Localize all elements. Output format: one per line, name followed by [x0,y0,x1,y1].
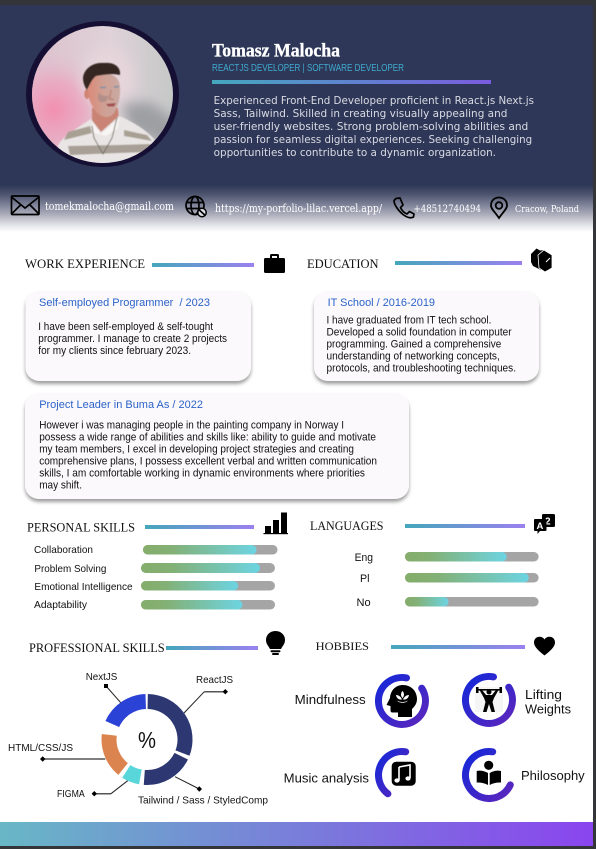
location: Cracow, Poland [515,205,579,215]
profile summary: user-friendly websites. Strong problem-solving abilities and [214,120,528,133]
icon: bar chart [264,512,288,534]
chart: personal skills bars [34,545,278,611]
card body: Developed a solid foundation in computer [326,326,512,338]
icon: location pin [491,198,507,218]
icon: reader with book [477,761,501,785]
label: Tailwind / Sass / StyledComp: Tailwind / Sass / StyledComp [138,796,268,807]
label: HTML/CSS/JS: HTML/CSS/JS [8,743,73,754]
icon: weightlifter [475,687,503,712]
card body: programming. Gained a comprehensive [326,338,501,350]
label: FIGMA: FIGMA [57,789,85,800]
segment: Tailwind / Sass / StyledComp [144,756,181,778]
skill: problem solving [34,563,275,575]
chart: professional skills donut [8,672,268,807]
label: NextJS: NextJS [86,672,117,683]
profile summary: Experienced Front-End Developer proficient in React.js Next.js [214,94,534,107]
profile summary: passion for seamless digital experiences. Seeking challenging [214,133,532,146]
heading: languages [310,519,525,533]
card title: Self-employed Programmer / 2023 [39,297,210,309]
icon: books [531,248,552,272]
heading: work experience: WORK EXPERIENCE [25,257,145,271]
segment: HTML/CSS/JS [109,735,123,769]
name and role [212,40,404,74]
label: Tailwind / Sass / StyledComp [138,777,268,807]
website: https://my-porfolio-lilac.vercel.app/ [215,202,382,215]
icon: translate [534,514,555,534]
email: tomekmalocha@gmail.com [45,200,174,213]
skill: collaboration [34,545,278,556]
chart: language bars [355,552,539,609]
hobby: mindfulness: Mindfulness [295,692,366,707]
skill: problem solving: Problem Solving [34,564,107,575]
heading: personal skills: PERSONAL SKILLS [27,520,135,534]
language: Norwegian: No [356,597,371,609]
card body: possess a wide range of abilities and skills like: ability to guide and motivate [39,431,376,443]
heading: work experience [25,257,254,271]
label: ReactJS [184,675,233,713]
heading: languages: LANGUAGES [310,519,384,533]
card body [39,419,377,491]
segment: NextJS [112,702,146,724]
card body: may shift. [39,479,82,491]
heading: hobbies: HOBBIES [316,639,369,653]
card body: protocols, and troubleshooting techniques. [326,362,516,374]
hobby: music analysis [284,752,416,794]
skill: emotional intelligence [34,581,275,593]
segment: FIGMA [126,771,140,777]
card title: Project Leader in Buma As / 2022 [39,399,203,411]
hobby: music analysis: Music analysis [284,771,369,786]
role: REACTJS DEVELOPER | SOFTWARE DEVELOPER [212,63,404,74]
header accent rule [212,80,491,84]
name: Tomasz Malocha [212,40,340,62]
icon: music note [392,762,416,786]
donut centre label: % [138,727,156,753]
icon: light bulb [266,631,285,655]
profile photo [26,20,180,170]
heading: hobbies [316,639,525,653]
icon: envelope [12,196,39,214]
language: English: Eng [355,552,373,564]
card body: However i was managing people in the painting company in Norway I [39,419,344,431]
language: Norwegian [356,597,539,609]
icon: globe [186,196,206,217]
skill: collaboration: Collaboration [34,545,93,556]
panel: project leader [25,393,409,499]
hobby: lifting weights: Weights [525,702,571,717]
icon: briefcase [264,254,285,273]
language: Polish: Pl [360,573,370,585]
hobby: mindfulness [295,677,425,724]
skill: adaptability: Adaptability [34,600,88,611]
hobby: philosophy [465,752,585,799]
footer bar [0,822,593,846]
label: FIGMA [57,781,128,800]
icon: translate: 2 [545,516,551,528]
card body: my team members, I excel in developing project strategies and creating [39,443,354,455]
skill: emotional intelligence: Emotional Intelligence [34,582,133,593]
card body: understanding of networking concepts, [326,350,500,362]
hobby: lifting weights [465,676,571,723]
panel: IT school [314,291,539,381]
hobby: philosophy: Philosophy [521,768,585,783]
heading: personal skills [27,520,254,534]
heading: education: EDUCATION [307,257,379,271]
heading: professional skills [29,641,258,655]
skill: adaptability [34,600,275,611]
icon: translate: A [536,521,544,532]
card body [326,314,516,374]
card body: skills, I am comfortable working in dynamic environments where priorities [39,467,365,479]
card body: I have graduated from IT tech school. [326,314,491,326]
label: ReactJS: ReactJS [196,675,233,686]
profile summary: Sass, Tailwind. Skilled in creating visually appealing and [214,107,507,120]
segment: ReactJS [148,702,185,753]
icon: head with lotus [386,685,417,717]
heading: education [307,257,522,271]
label: HTML/CSS/JS [8,743,105,762]
icon: phone [394,198,414,218]
panel: self-employed programmer [26,291,251,381]
card body: programmer. I manage to create 2 projects [38,333,227,345]
profile summary: opportunities to contribute to a dynamic organization. [214,146,496,159]
header banner [0,5,593,232]
card body: I have been self-employed & self-tought [38,321,213,333]
card title: IT School / 2016-2019 [328,297,435,309]
phone number: +48512740494 [414,203,481,215]
language: Polish [360,573,539,585]
card body: for my clients since february 2023. [38,345,191,357]
heading: professional skills: PROFESSIONAL SKILLS [29,641,165,655]
card body [38,321,227,357]
card body: comprehensive plans, I possess excellent verbal and written communication [39,455,377,467]
icon: heart [534,637,555,656]
contact row [12,196,579,218]
label: NextJS [86,672,121,703]
language: English [355,552,539,564]
hobby: lifting weights: Lifting [525,687,562,702]
profile summary [214,94,534,159]
